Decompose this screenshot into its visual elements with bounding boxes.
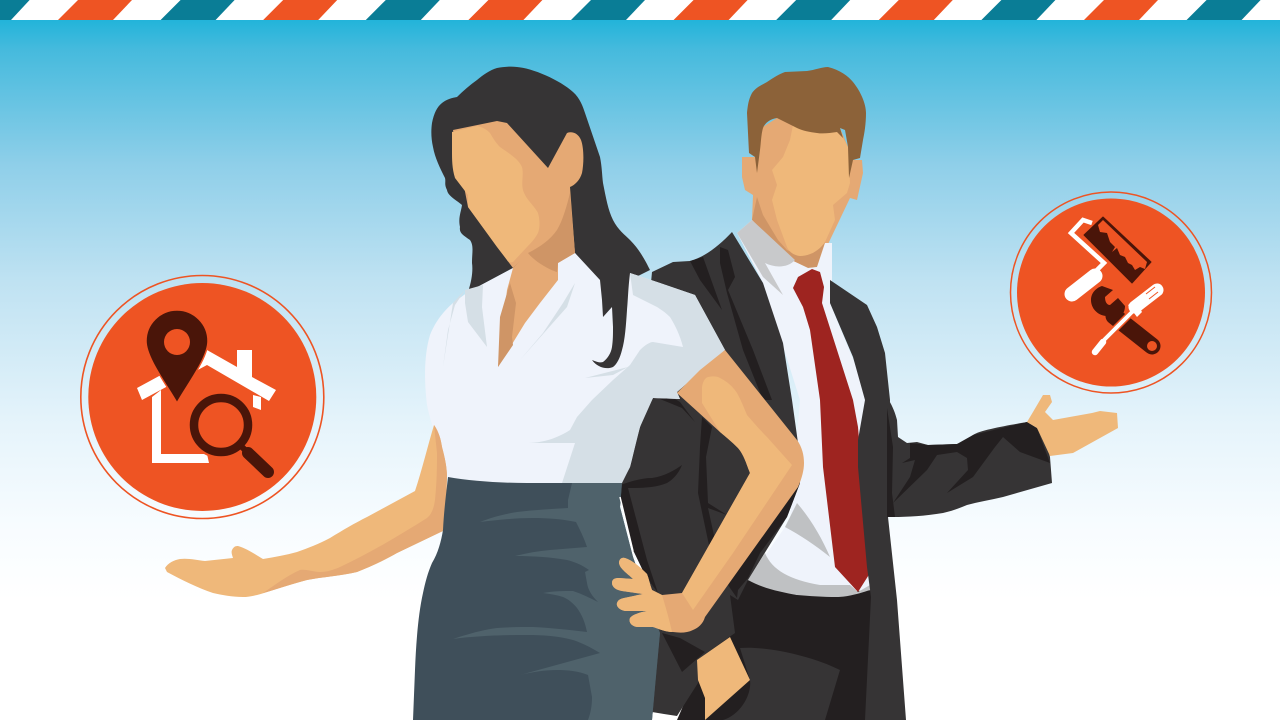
woman bbox=[165, 67, 804, 720]
man hair bbox=[747, 67, 866, 178]
woman chest shadow bbox=[498, 283, 516, 367]
man ears and face shade bbox=[742, 118, 863, 268]
man tie bbox=[793, 269, 870, 592]
man bbox=[620, 67, 1118, 720]
jacket lower left piece bbox=[652, 625, 705, 716]
icon badge: home search bbox=[81, 276, 324, 518]
woman left arm bbox=[165, 425, 447, 597]
woman right arm and hand bbox=[612, 350, 804, 633]
man shirt shadows bbox=[748, 503, 870, 597]
woman left arm shade bbox=[263, 425, 447, 593]
man shirt bbox=[737, 220, 872, 590]
man face bbox=[772, 125, 850, 256]
woman blouse bbox=[425, 253, 725, 483]
man lower hand bbox=[697, 637, 750, 720]
man jacket right lapel bbox=[830, 280, 906, 720]
man pants bbox=[677, 580, 872, 720]
man jacket dark folds bbox=[620, 247, 800, 672]
man jacket fold bbox=[887, 408, 895, 517]
woman neck bbox=[498, 250, 558, 367]
man neck shadow bbox=[752, 197, 825, 268]
man collar shadow bbox=[737, 220, 795, 295]
man right hand bbox=[1027, 395, 1118, 456]
woman neck shadow bbox=[528, 193, 575, 272]
man sleeve and jacket right panel bbox=[880, 397, 1052, 517]
blouse shadows bbox=[443, 273, 725, 483]
woman hair bbox=[431, 67, 650, 292]
airmail stripe border bbox=[0, 0, 1280, 20]
skirt lighter panel and folds bbox=[453, 483, 660, 720]
man jacket left body bbox=[620, 232, 800, 672]
icon badge: repair tools bbox=[1010, 192, 1212, 393]
woman skirt bbox=[413, 477, 660, 720]
woman face bbox=[452, 126, 540, 262]
man jacket lower front bbox=[723, 648, 840, 720]
woman ear and face shade bbox=[453, 121, 583, 268]
woman hair strand over blouse bbox=[592, 273, 630, 368]
white gap between skirt and jacket bbox=[620, 497, 633, 551]
